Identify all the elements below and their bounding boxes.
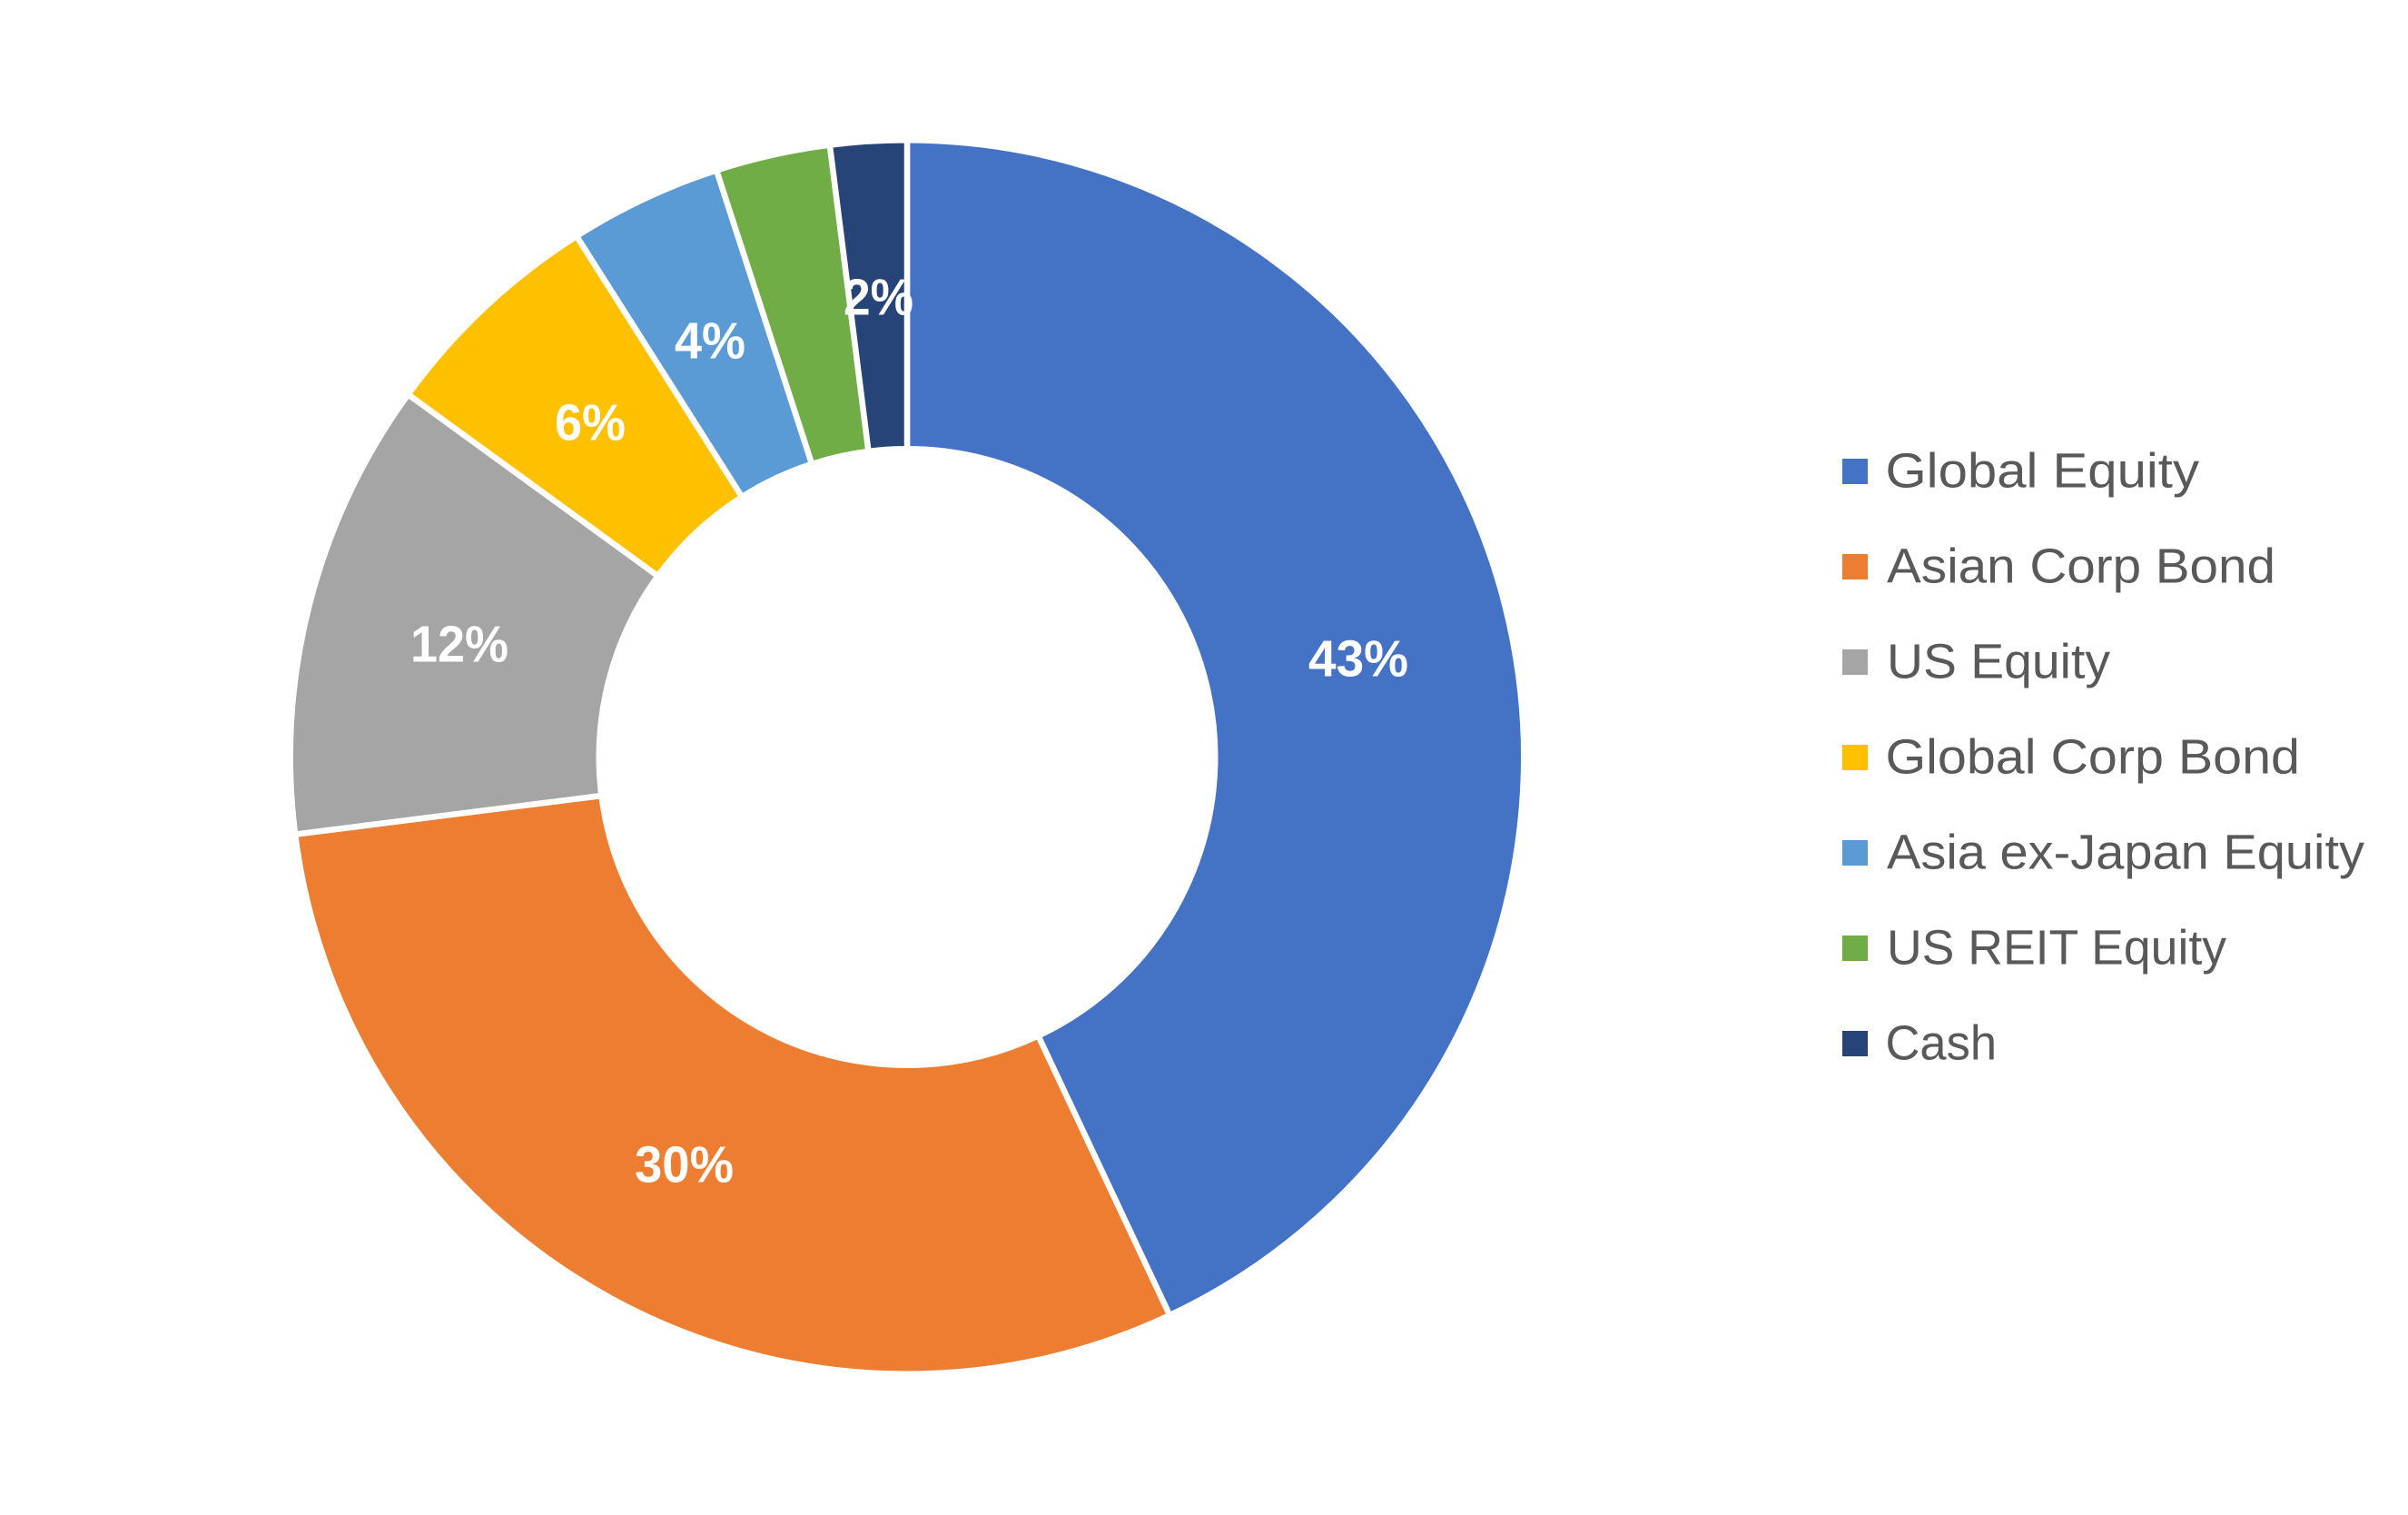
label: 4%: 4% (675, 312, 745, 371)
segment: Asia ex-Japan Equity 4% (577, 170, 812, 497)
label: 30%: 30% (635, 1135, 734, 1193)
legend item: Asian Corp Bond: Asian Corp Bond (1887, 540, 2275, 594)
data labels (410, 269, 1408, 1193)
segment: Asian Corp Bond 30% (295, 796, 1169, 1374)
legend item: Global Corp Bond: Global Corp Bond (1885, 730, 2300, 785)
legend item: US REIT Equity: US REIT Equity (1887, 921, 2226, 975)
legend (1842, 443, 2364, 1070)
legend item: US Equity: US Equity (1887, 634, 2110, 688)
legend item: Global Equity: Global Equity (1885, 443, 2199, 498)
segment: US Equity 12% (291, 394, 658, 835)
label: 12%: 12% (410, 616, 508, 674)
donut chart (291, 140, 1524, 1374)
segment: Cash 2% (830, 140, 907, 451)
legend item: Cash: Cash (1885, 1015, 1997, 1070)
label: 43%: 43% (1308, 630, 1408, 688)
label: 2%: 2% (844, 269, 913, 327)
segment: US REIT Equity 3% (716, 145, 868, 464)
legend item: Asia ex-Japan Equity: Asia ex-Japan Equity (1887, 825, 2364, 879)
label: 6%: 6% (555, 394, 626, 452)
segment: Global Equity 43% (907, 140, 1524, 1315)
segment: Global Corp Bond 6% (408, 236, 742, 576)
